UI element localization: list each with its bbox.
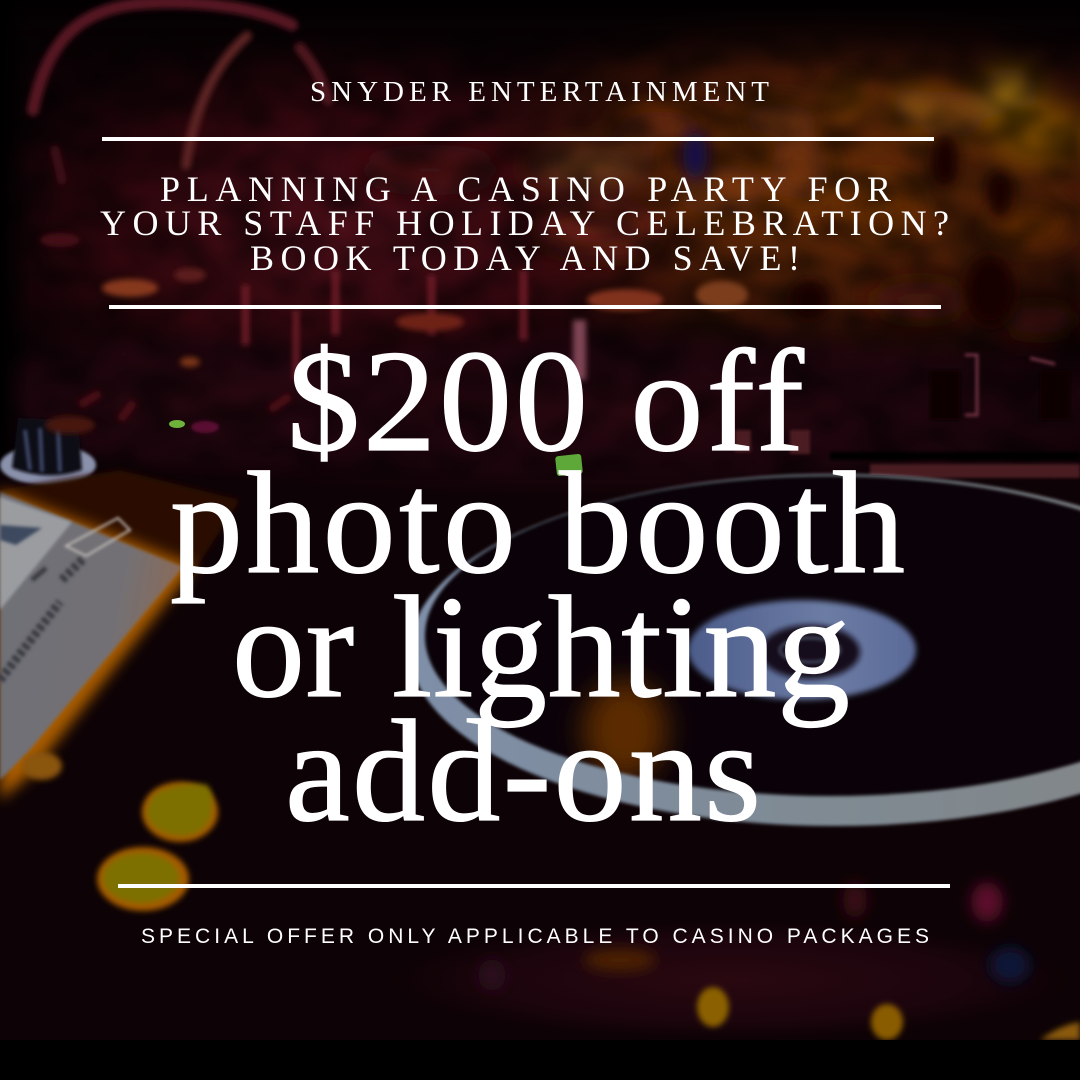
main offer headline: $200 off (287, 320, 804, 482)
main offer headline (170, 320, 905, 852)
mottled photo texture (0, 30, 1080, 480)
turntable platter (410, 474, 1080, 826)
small console details (735, 355, 1080, 478)
LCD screen (0, 490, 195, 800)
knob (0, 416, 96, 485)
main offer headline: photo booth (170, 442, 905, 604)
divider: bottom (118, 884, 950, 888)
dark gaps in upper right (790, 132, 1016, 326)
footer disclaimer: SPECIAL OFFER ONLY APPLICABLE TO CASINO PACKAGES (141, 925, 929, 948)
divider: middle (109, 305, 941, 309)
divider: top (102, 137, 934, 141)
cables at top left (33, 2, 328, 180)
small indicator lights (80, 393, 583, 476)
main offer headline: add-ons (285, 690, 761, 852)
amber bokeh lights (22, 752, 1080, 1040)
subheading: PLANNING A CASINO PARTY FOR (160, 169, 891, 209)
dark housing with orange edge (0, 470, 240, 570)
subheading: BOOK TODAY AND SAVE! (250, 238, 800, 278)
subheading: YOUR STAFF HOLIDAY CELEBRATION? (100, 203, 949, 243)
mixer faders (40, 233, 748, 380)
brand name: SNYDER ENTERTAINMENT (310, 76, 769, 108)
main offer headline: or lighting (232, 566, 850, 728)
subheading (100, 169, 949, 278)
